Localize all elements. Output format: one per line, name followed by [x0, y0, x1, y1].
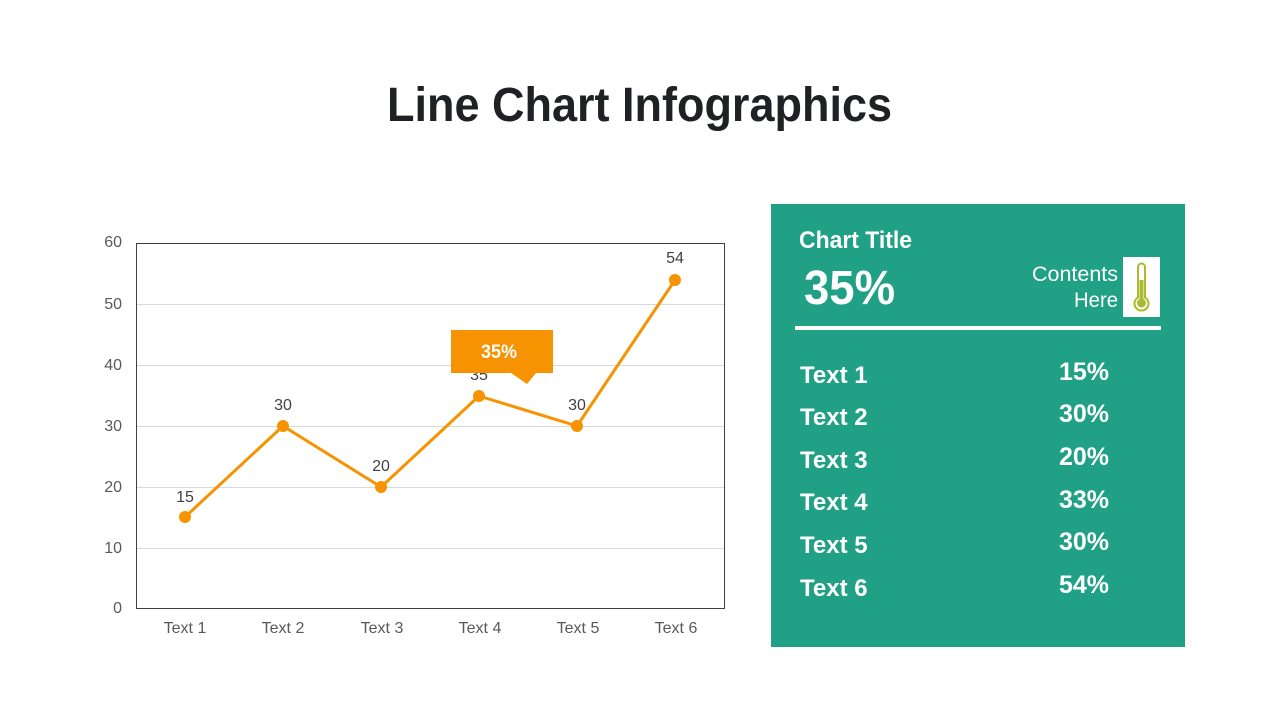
row values: 15%: [1059, 358, 1109, 386]
panel: chart summary: [771, 204, 1185, 647]
x axis labels: Text 2: [262, 620, 304, 637]
x axis labels: Text 4: [459, 620, 501, 637]
icon: thermometer: [1123, 257, 1160, 317]
data labels: 30: [568, 397, 586, 414]
y axis labels: [104, 234, 122, 617]
x axis labels: Text 5: [557, 620, 599, 637]
callout: [451, 330, 553, 384]
y axis labels: 0: [113, 600, 122, 617]
row labels: [800, 362, 868, 602]
data labels: 35: [470, 367, 488, 384]
row values: [1059, 358, 1109, 599]
x axis labels: Text 1: [164, 620, 206, 637]
data labels: 15: [176, 489, 194, 506]
line chart: [104, 234, 724, 637]
contents text: Contents: [1032, 263, 1118, 286]
row values: 54%: [1059, 571, 1109, 599]
data labels: 30: [274, 397, 292, 414]
row labels: Text 6: [800, 575, 868, 602]
title: Line Chart Infographics: [387, 79, 892, 132]
x axis labels: Text 6: [655, 620, 697, 637]
y axis labels: 20: [104, 479, 122, 496]
row values: 20%: [1059, 443, 1109, 471]
row labels: Text 2: [800, 404, 868, 431]
row labels: Text 5: [800, 532, 868, 559]
big percentage: 35%: [804, 262, 895, 315]
x axis labels: [164, 620, 697, 637]
data line: [185, 280, 675, 517]
y axis labels: 10: [104, 540, 122, 557]
row labels: Text 4: [800, 489, 868, 516]
y axis labels: 40: [104, 357, 122, 374]
row values: 30%: [1059, 528, 1109, 556]
divider: [795, 326, 1161, 330]
row values: 30%: [1059, 400, 1109, 428]
data points: [179, 274, 681, 523]
data labels: 54: [666, 250, 684, 267]
row labels: Text 1: [800, 362, 868, 389]
plot frame: [136, 244, 724, 608]
row labels: Text 3: [800, 447, 868, 474]
panel heading: Chart Title: [799, 227, 912, 254]
data labels: [176, 250, 684, 506]
y axis labels: 60: [104, 234, 122, 251]
data labels: 20: [372, 458, 390, 475]
callout: 35%: [481, 342, 517, 363]
x axis labels: Text 3: [361, 620, 403, 637]
y axis labels: 30: [104, 418, 122, 435]
row values: 33%: [1059, 486, 1109, 514]
y axis labels: 50: [104, 296, 122, 313]
contents text: Here: [1074, 289, 1118, 312]
contents text: [1032, 263, 1118, 312]
